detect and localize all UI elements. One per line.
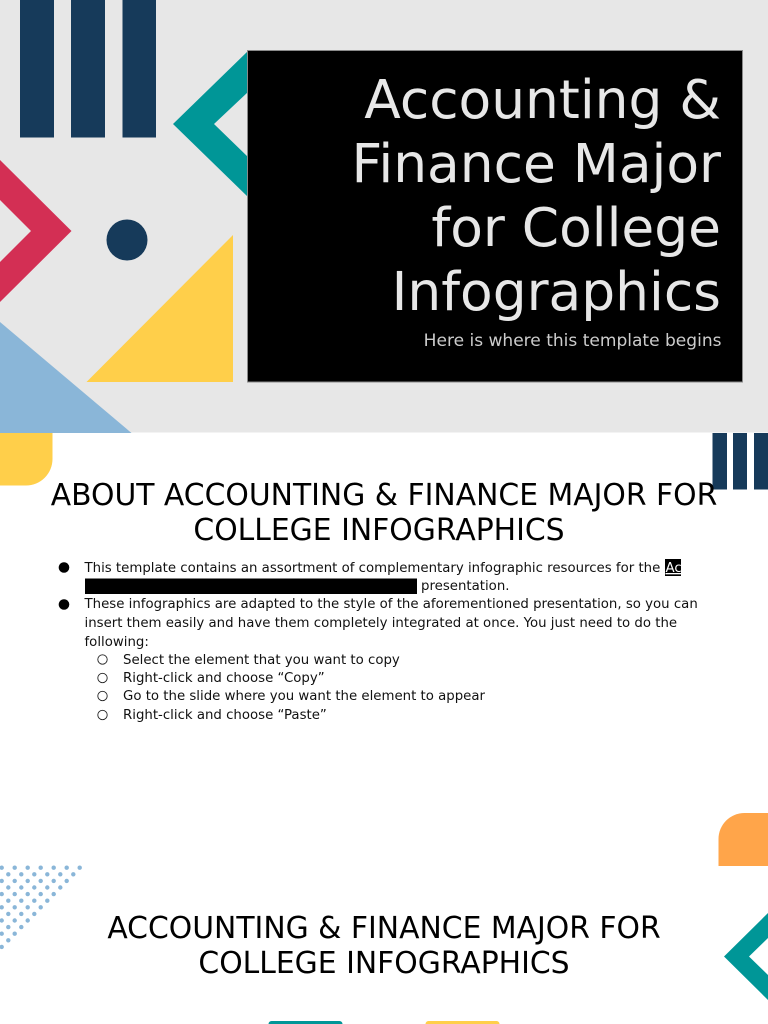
icon: yellow card top	[426, 1021, 500, 1024]
icon: orange rounded tab	[718, 813, 768, 866]
text block: bullet list	[59, 559, 698, 723]
redacted link start: Ac	[666, 561, 682, 576]
icon: yellow rounded tab	[0, 433, 52, 486]
text block: bullet list: This template contains an assortment of complementary infographic resources for the	[84, 561, 660, 576]
icon: dotted triangle	[0, 866, 82, 949]
icon: teal chevron right edge	[724, 913, 768, 1000]
subtitle: Here is where this template begins	[424, 331, 722, 351]
text block: bullet list: These infographics are adapted to the style of the aforementioned presentation, so you can	[84, 597, 698, 612]
panel: about slide	[0, 433, 768, 723]
icon: navy circle	[106, 220, 148, 260]
heading: about: ABOUT ACCOUNTING & FINANCE MAJOR FOR	[51, 478, 717, 513]
icon: yellow triangle	[86, 235, 233, 382]
text block: bullet list: insert them easily and have them completely integrated at once. You just need to do the	[84, 616, 677, 631]
icon: navy bars	[20, 0, 156, 138]
title: Accounting &	[364, 68, 721, 131]
text block: bullet list: following:	[84, 635, 149, 650]
title: Infographics	[392, 260, 721, 323]
icon: teal chevron	[173, 51, 248, 197]
icon: navy bars small	[712, 433, 768, 490]
text block: bullet list: presentation.	[421, 579, 510, 594]
title: for College	[431, 196, 721, 259]
text block: bullet list: Select the element that you want to copy	[123, 653, 400, 668]
text block: bullet list: Right-click and choose “Copy”	[123, 671, 325, 686]
heading: second title: ACCOUNTING & FINANCE MAJOR FOR	[107, 911, 661, 946]
title panel	[248, 50, 742, 382]
text block: bullet list: Go to the slide where you want the element to appear	[123, 689, 486, 704]
icon: blue triangle	[0, 322, 132, 433]
heading: second title: COLLEGE INFOGRAPHICS	[198, 946, 570, 981]
icon: red chevron	[0, 160, 72, 302]
redacted link bar	[85, 578, 417, 594]
panel: cover slide	[0, 0, 768, 433]
text block: bullet list: Right-click and choose “Paste”	[123, 708, 327, 723]
heading: about: COLLEGE INFOGRAPHICS	[193, 513, 565, 548]
panel: next slide	[0, 813, 768, 1024]
title: Finance Major	[352, 132, 721, 195]
icon: teal card top	[268, 1021, 342, 1024]
